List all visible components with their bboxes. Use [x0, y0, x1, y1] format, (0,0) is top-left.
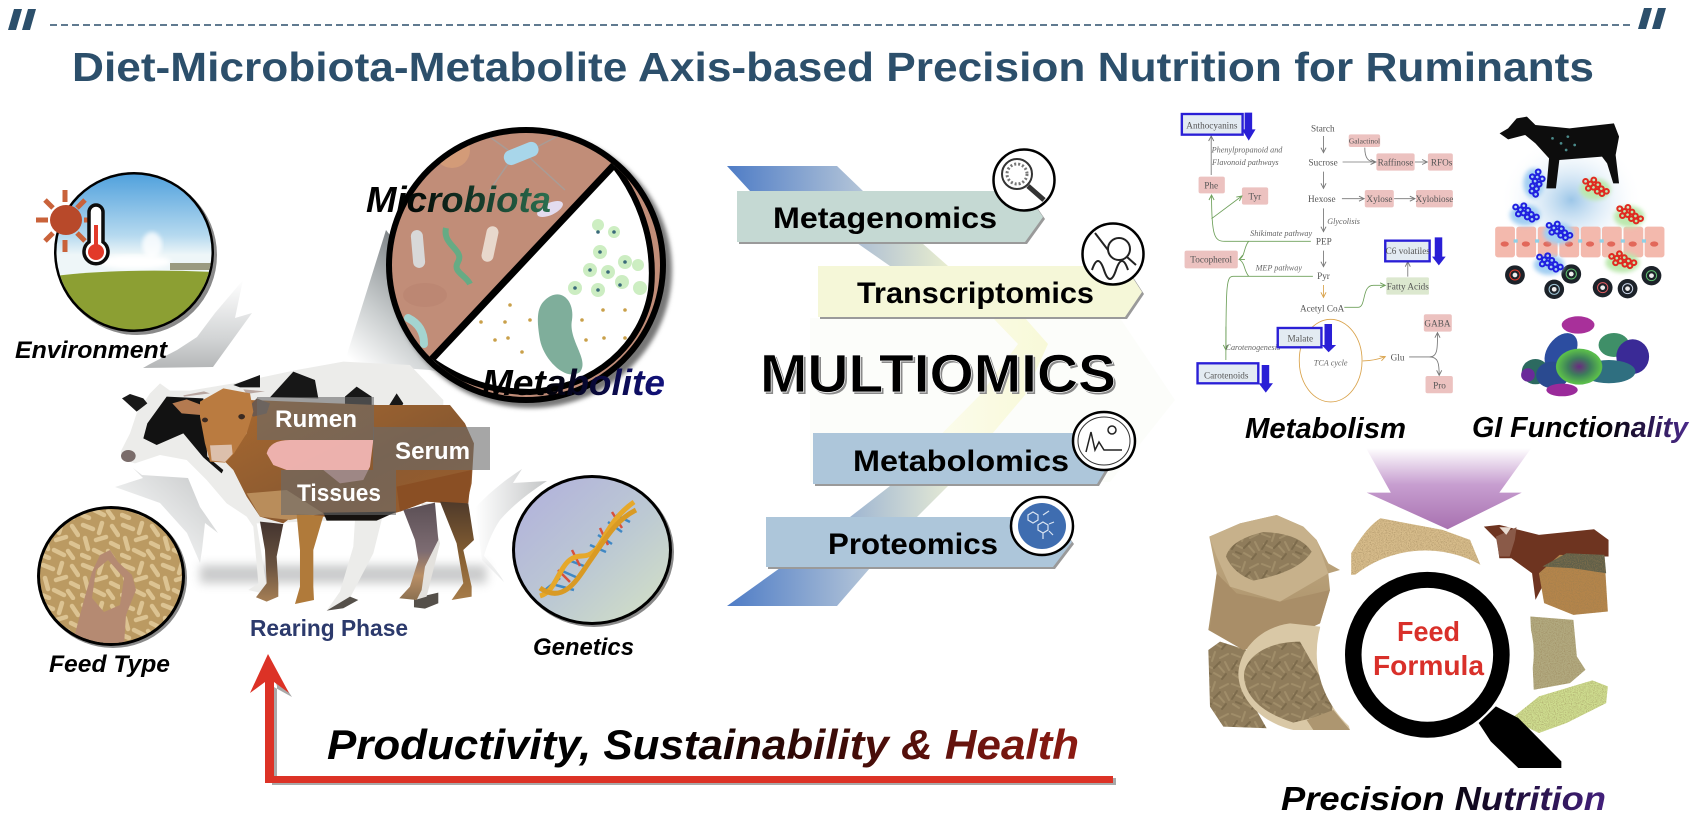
- icon: sun and thermometer: [36, 190, 108, 264]
- bacteria clusters: [1510, 168, 1645, 275]
- label: serum: Serum: [395, 438, 470, 465]
- label: serum: [373, 427, 490, 470]
- metabolite labels: GABA: [1424, 318, 1451, 328]
- metabolite labels: Raffinose: [1378, 157, 1413, 167]
- epithelial cells: [1495, 227, 1664, 257]
- illustration: cows: [121, 362, 487, 611]
- panel: feed type circle: [37, 506, 187, 648]
- pathway arrows orange: [1299, 285, 1385, 402]
- metabolite labels: MEP pathway: [1255, 264, 1302, 273]
- metabolite labels: Glycolisis: [1327, 217, 1360, 226]
- label: rearing phase: Rearing Phase: [250, 615, 408, 641]
- icon: metabolomics spectrum: [1073, 412, 1135, 470]
- black cow: [1500, 117, 1619, 188]
- pellets: [1530, 616, 1585, 690]
- metabolite labels: Galactinol: [1349, 136, 1380, 145]
- highlighted metabolites: [1182, 113, 1446, 393]
- bar: proteomics: Proteomics: [828, 528, 998, 561]
- label: metabolism: Metabolism: [1245, 413, 1406, 445]
- label: tissues: [281, 470, 396, 515]
- metabolite labels: Pro: [1433, 381, 1446, 391]
- metabolite labels: Tocopherol: [1190, 254, 1233, 264]
- heading: multiomics: MULTIOMICS: [762, 346, 1118, 406]
- label: rumen: Rumen: [275, 406, 357, 433]
- icon: metagenomics magnifier: [994, 150, 1054, 210]
- bar: transcriptomics: Transcriptomics: [857, 277, 1094, 310]
- node: fatty acids: [1386, 277, 1429, 295]
- straw bale: [1351, 518, 1480, 575]
- title: Diet-Microbiota-Metabolite Axis-based Precision Nutrition for Ruminants: [72, 44, 1594, 90]
- label: feed type: Feed Type: [49, 651, 170, 678]
- bar: metabolomics: Metabolomics: [853, 445, 1069, 478]
- metabolite cluster: [479, 219, 647, 374]
- metabolite labels: RFOs: [1431, 157, 1453, 167]
- metabolite labels: Carotenogenesis: [1226, 343, 1280, 352]
- metabolite labels: Acetyl CoA: [1300, 303, 1345, 313]
- label: genetics: Genetics: [533, 634, 634, 661]
- label: feed formula: [1373, 616, 1484, 681]
- arrow: to precision nutrition: [1366, 448, 1531, 529]
- panel: multiomics ribbon background: [727, 166, 1175, 606]
- label: precision nutrition: Precision Nutrition: [1281, 780, 1606, 817]
- metabolite labels: Fatty Acids: [1387, 281, 1429, 291]
- illustration: GI functionality: [1495, 117, 1664, 396]
- metabolite labels: Pyr: [1317, 271, 1330, 281]
- panel: microbiota and metabolite lens: [386, 127, 672, 408]
- metabolite labels: Starch: [1311, 124, 1335, 134]
- metabolite labels: Phe: [1204, 181, 1218, 191]
- pathway arrows green: [1212, 195, 1385, 360]
- metabolite labels: Tyr: [1249, 191, 1261, 201]
- label: rumen: [257, 397, 374, 440]
- highlighted metabolites: C6 volatiles: [1386, 246, 1430, 256]
- highlighted metabolites: Malate: [1288, 334, 1313, 344]
- bar: proteomics: [766, 517, 1074, 569]
- label: GI functionality: GI Functionality: [1472, 412, 1690, 444]
- highlighted metabolites: Carotenoids: [1204, 371, 1249, 381]
- bar: transcriptomics: [818, 266, 1144, 319]
- bar: metagenomics: [737, 191, 1045, 244]
- corn silage: [1514, 680, 1608, 733]
- heading: multiomics: MULTIOMICS: [760, 344, 1116, 404]
- label: microbiota: Microbiota: [366, 179, 551, 220]
- metabolite labels: Hexose: [1308, 194, 1336, 204]
- label: feed formula: Feed: [1397, 616, 1460, 647]
- title decoration: dashed rule with slashes: [8, 8, 1666, 30]
- metabolite labels: TCA cycle: [1314, 358, 1348, 367]
- immune rings: [1505, 264, 1661, 299]
- arrow: environment to cow: [143, 280, 252, 368]
- chart: metabolism pathway: [1182, 113, 1453, 402]
- panel: environment circle: [54, 172, 217, 340]
- label: metabolite: Metabolite: [482, 362, 665, 403]
- illustration: feed formula collage: [1317, 448, 1609, 768]
- metabolite labels: Sucrose: [1309, 157, 1338, 167]
- cow shadow: [200, 565, 487, 583]
- bar: metagenomics: Metagenomics: [773, 202, 997, 235]
- holstein cow: [121, 362, 443, 611]
- metabolite labels: Shikimate pathway: [1250, 229, 1313, 238]
- label: feed formula: Formula: [1373, 650, 1484, 681]
- cone: zoom projection from cow to lens: [344, 230, 520, 390]
- metabolite labels: [1190, 124, 1453, 391]
- arrow: feed type to cow: [115, 468, 218, 563]
- icon: rumen stomach: [267, 440, 373, 483]
- brown head: [172, 399, 202, 415]
- arrow: genetics to cow: [475, 469, 547, 582]
- pathway arrows gray: [1211, 136, 1439, 375]
- icon: proteomics molecule: [1011, 497, 1073, 555]
- label: productivity, sustainability and health: Productivity, Sustainability & Health: [327, 721, 1079, 768]
- small cow on feed: [1484, 525, 1609, 615]
- panel: genetics circle: [512, 475, 674, 627]
- white backing: [1317, 551, 1534, 756]
- organoid: [1521, 316, 1649, 396]
- nodes in pink: [1185, 134, 1453, 393]
- microbes: [403, 130, 565, 344]
- icon: transcriptomics DNA: [1082, 224, 1144, 284]
- brown cow: [172, 388, 474, 604]
- bar: metabolomics: [813, 433, 1114, 486]
- arrow: feedback to rearing phase: [250, 654, 1116, 785]
- metabolite labels: Xylose: [1366, 194, 1392, 204]
- label: tissues: Tissues: [297, 480, 381, 507]
- label: environment: Environment: [15, 337, 168, 364]
- blue glow: [1500, 137, 1643, 263]
- metabolite labels: Flavonoid pathways: [1211, 158, 1279, 167]
- metabolite labels: Phenylpropanoid and: [1211, 146, 1283, 155]
- metabolite labels: Xylobiose: [1415, 194, 1453, 204]
- metabolite labels: PEP: [1316, 236, 1332, 246]
- illustration: feed sack and bowl: [1208, 515, 1350, 730]
- metabolite labels: Glu: [1391, 352, 1405, 362]
- highlighted metabolites: Anthocyanins: [1186, 120, 1238, 130]
- magnifier: [1353, 580, 1561, 768]
